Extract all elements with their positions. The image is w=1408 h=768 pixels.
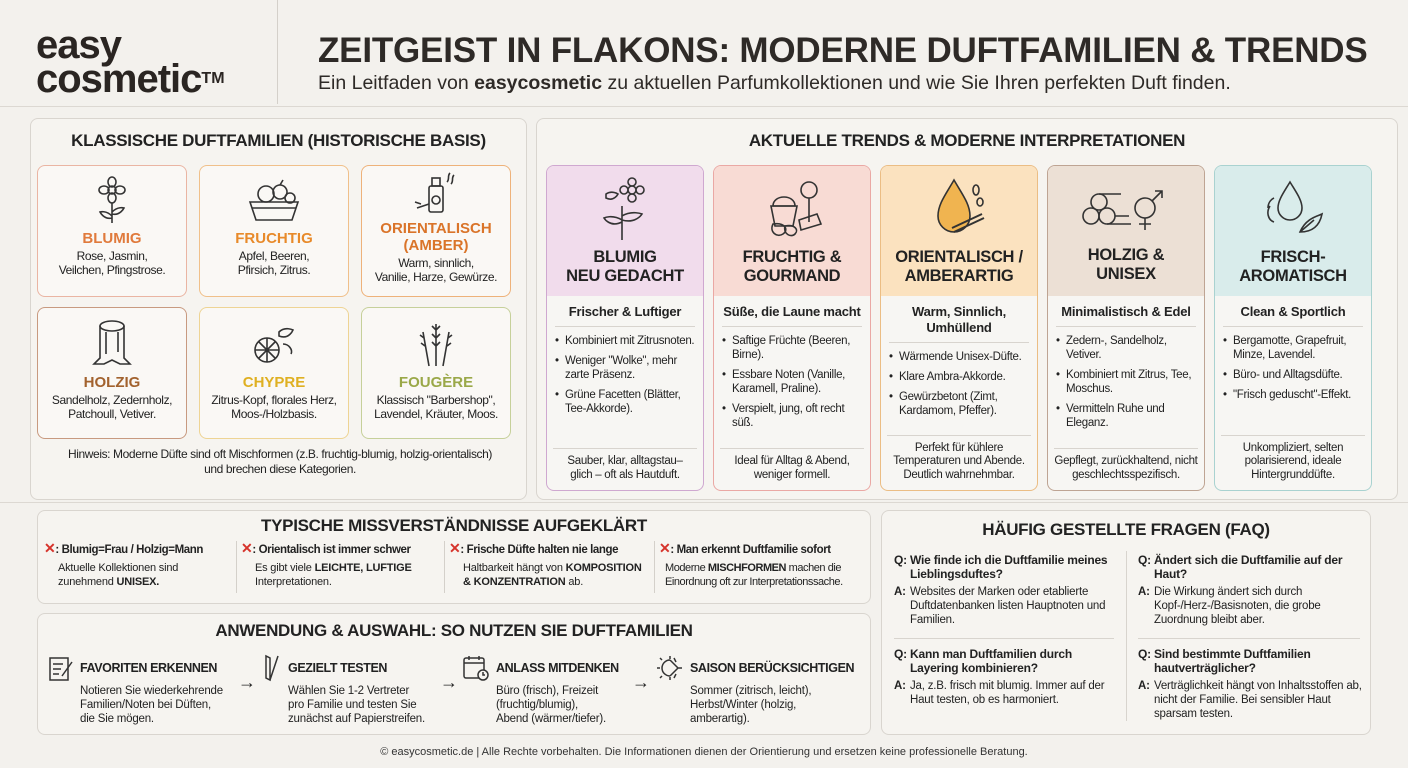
card: holzig: Sandelholz, Zedernholz,: [52, 393, 172, 407]
card: orientalisch amberartig: Gewürzbetont (Zimt, Kardamom, Pfeffer).: [899, 391, 997, 417]
card: chypre: [199, 307, 349, 439]
card: holzig unisex: Vermitteln Ruhe und Eleganz.: [1066, 403, 1165, 429]
card: orientalisch amberartig: Perfekt für kühlere Temperaturen und Abende. Deutlich wahrnehmbar.: [893, 442, 1025, 480]
card: fruchtig gourmand: Saftige Früchte (Beeren, Birne).: [732, 335, 850, 361]
step: favoriten: Familien/Noten bei Düften,: [80, 699, 211, 711]
card: blumig: Veilchen, Pfingstrose.: [59, 263, 165, 277]
myth 2: Es gibt viele LEICHTE, LUFTIGE: [255, 562, 412, 574]
card: fruchtig: Apfel, Beeren,: [239, 249, 309, 263]
card: frisch aromatisch: FRISCH-: [1261, 248, 1325, 266]
step: saison: [657, 656, 854, 725]
step: saison: SAISON BERÜCKSICHTIGEN: [690, 661, 854, 675]
card: frisch aromatisch: Unkompliziert, selten polarisierend, ideale Hintergrunddüfte.: [1243, 442, 1343, 480]
card: holzig unisex: Minimalistisch & Edel: [1061, 304, 1191, 319]
faq 4: [1138, 647, 1362, 720]
faq 3: Q:: [894, 647, 907, 661]
step: favoriten: die Sie mögen.: [80, 713, 154, 725]
card: holzig unisex: [1047, 165, 1205, 491]
card: fruchtig: Pfirsich, Zitrus.: [238, 263, 310, 277]
card: frisch aromatisch: Clean & Sportlich: [1241, 304, 1345, 319]
step: testen: [265, 654, 425, 725]
title: ZEITGEIST IN FLAKONS: MODERNE DUFTFAMILIEN & TRENDS: [318, 31, 1368, 70]
card: blumig neu gedacht: BLUMIG: [593, 248, 657, 266]
heading: missverstaendnisse: TYPISCHE MISSVERSTÄNDNISSE AUFGEKLÄRT: [261, 516, 647, 535]
step: saison: Herbst/Winter (holzig,: [690, 699, 796, 711]
card: blumig neu gedacht: Kombiniert mit Zitrusnoten.: [565, 335, 694, 347]
step: testen: pro Familie und testen Sie: [288, 699, 416, 711]
faq 1: A:: [894, 586, 906, 598]
card: frisch aromatisch: Büro- und Alltagsdüfte.: [1233, 369, 1342, 381]
card: orientalisch: (AMBER): [404, 237, 468, 254]
card: holzig unisex: Gepflegt, zurückhaltend, nicht geschlechtsspezifisch.: [1054, 455, 1198, 480]
myth 3: [444, 541, 642, 593]
arrow: →: [238, 672, 256, 692]
faq 3: Kann man Duftfamilien durch Layering kombinieren?: [910, 647, 1072, 675]
logo: cosmeticTM: [36, 57, 225, 101]
card: orientalisch: Vanilie, Harze, Gewürze.: [375, 270, 497, 284]
card: frisch aromatisch: AROMATISCH: [1239, 267, 1347, 285]
step: testen: zunächst auf Papierstreifen.: [288, 713, 425, 725]
step: saison: amberartig).: [690, 713, 750, 725]
card: blumig neu gedacht: [546, 165, 704, 491]
step: anlass: Abend (wärmer/tiefer).: [496, 713, 606, 725]
card: orientalisch amberartig: AMBERARTIG: [905, 267, 1013, 285]
myth 1: ✕: Blumig=Frau / Holzig=Mann: [44, 540, 203, 556]
myth 3: ✕: Frische Düfte halten nie lange: [449, 540, 618, 556]
card: fruchtig gourmand: GOURMAND: [744, 267, 840, 285]
faq 2: A:: [1138, 586, 1150, 598]
card: orientalisch amberartig: Wärmende Unisex-Düfte.: [899, 351, 1022, 363]
card: orientalisch: ORIENTALISCH: [380, 220, 492, 237]
card: fruchtig gourmand: weniger formell.: [754, 468, 830, 480]
logo: easy: [36, 23, 121, 67]
faq 4: Q:: [1138, 647, 1151, 661]
note: und brechen diese Kategorien.: [204, 462, 356, 476]
note: [68, 447, 492, 476]
step: saison: Sommer (zitrisch, leicht),: [690, 685, 811, 697]
step: favoriten: [49, 657, 223, 725]
faq 3: Ja, z.B. frisch mit blumig. Immer auf der Haut testen, ob es harmoniert.: [910, 680, 1104, 706]
heading: klassische: KLASSISCHE DUFTFAMILIEN (HISTORISCHE BASIS): [71, 131, 486, 150]
card: fougere: [361, 307, 511, 439]
myth 4: Einordnung oft zur Interpretationssache.: [665, 576, 843, 588]
card: blumig neu gedacht: glich – oft als Hautduft.: [570, 468, 680, 480]
card: blumig neu gedacht: Weniger "Wolke", mehr zarte Präsenz.: [565, 355, 677, 381]
card: fougere: Klassisch "Barbershop",: [377, 393, 495, 407]
card: holzig: Patchoull, Vetiver.: [68, 407, 156, 421]
faq 4: Verträglichkeit hängt von Inhaltsstoffen ab, nicht der Familie. Bei sensibler Haut sparsam testen.: [1154, 680, 1362, 720]
card: orientalisch amberartig: Umhüllend: [926, 320, 992, 335]
card: orientalisch: Warm, sinnlich,: [398, 256, 474, 270]
arrow: →: [440, 672, 458, 692]
faq 3: [894, 647, 1104, 706]
myth 4: [654, 541, 843, 593]
card: orientalisch amberartig: ORIENTALISCH /: [895, 248, 1023, 266]
card: orientalisch amberartig: [880, 165, 1038, 491]
card: fruchtig gourmand: Verspielt, jung, oft recht süß.: [732, 403, 844, 429]
card: orientalisch amberartig: Warm, Sinnlich,: [912, 304, 1006, 319]
card: fougere: Lavendel, Kräuter, Moos.: [374, 407, 498, 421]
arrow: →: [632, 672, 650, 692]
card: frisch aromatisch: [1214, 165, 1372, 491]
card: holzig unisex: Zedern-, Sandelholz, Vetiver.: [1066, 335, 1167, 361]
card: blumig neu gedacht: NEU GEDACHT: [566, 267, 684, 285]
card: orientalisch: [361, 165, 511, 297]
myth 1: [44, 540, 203, 588]
card: fruchtig gourmand: FRUCHTIG &: [743, 248, 841, 266]
card: holzig unisex: HOLZIG &: [1088, 246, 1164, 264]
faq 4: A:: [1138, 680, 1150, 692]
step: testen: Wählen Sie 1-2 Vertreter: [288, 685, 409, 697]
card: chypre: CHYPRE: [243, 374, 305, 391]
faq 4: Sind bestimmte Duftfamilien hautverträglicher?: [1154, 647, 1311, 675]
card: fruchtig gourmand: Süße, die Laune macht: [723, 304, 861, 319]
faq 1: [894, 553, 1108, 626]
faq 1: Websites der Marken oder etablierte Duftdatenbanken listen Hauptnoten und Familien.: [910, 586, 1105, 626]
panel: anwendung: [37, 613, 871, 735]
card: blumig neu gedacht: Grüne Facetten (Blätter, Tee-Akkorde).: [565, 389, 681, 415]
card: holzig unisex: Kombiniert mit Zitrus, Tee, Moschus.: [1066, 369, 1191, 395]
myth 1: zunehmend UNISEX.: [58, 576, 159, 588]
panel: missverstaendnisse: [37, 510, 871, 604]
card: fougere: FOUGÈRE: [399, 374, 473, 391]
step: anlass: (fruchtig/blumig),: [496, 699, 578, 711]
myth 2: Interpretationen.: [255, 576, 332, 588]
panel: aktuelle trends: [536, 118, 1398, 500]
faq 1: Wie finde ich die Duftfamilie meines Lieblingsduftes?: [910, 553, 1107, 581]
card: holzig unisex: UNISEX: [1096, 265, 1156, 283]
card: fruchtig gourmand: Essbare Noten (Vanille, Karamell, Praline).: [732, 369, 845, 395]
step: favoriten: Notieren Sie wiederkehrende: [80, 685, 223, 697]
card: blumig: Rose, Jasmin,: [77, 249, 147, 263]
myth 2: [236, 541, 412, 593]
myth 1: Aktuelle Kollektionen sind: [58, 562, 178, 574]
faq 3: A:: [894, 680, 906, 692]
card: fruchtig: [199, 165, 349, 297]
faq 2: Ändert sich die Duftfamilie auf der Haut?: [1154, 553, 1342, 581]
card: blumig: BLUMIG: [82, 230, 142, 247]
step: anlass: [463, 656, 619, 725]
card: fruchtig gourmand: Ideal für Alltag & Abend,: [734, 455, 850, 467]
step: favoriten: FAVORITEN ERKENNEN: [80, 661, 217, 675]
heading: anwendung: ANWENDUNG & AUSWAHL: SO NUTZEN SIE DUFTFAMILIEN: [215, 621, 693, 640]
myth 3: & KONZENTRATION ab.: [463, 576, 583, 588]
card: fruchtig gourmand: [713, 165, 871, 491]
card: blumig neu gedacht: Sauber, klar, alltagstau–: [567, 455, 683, 467]
card: frisch aromatisch: "Frisch geduscht"-Effekt.: [1233, 389, 1351, 401]
card: chypre: Zitrus-Kopf, florales Herz,: [211, 393, 337, 407]
myth 4: ✕: Man erkennt Duftfamilie sofort: [659, 540, 831, 556]
card: blumig: [37, 165, 187, 297]
faq 1: Q:: [894, 553, 907, 567]
heading: faq: HÄUFIG GESTELLTE FRAGEN (FAQ): [982, 520, 1270, 539]
card: chypre: Moos-/Holzbasis.: [231, 407, 317, 421]
myth 3: Haltbarkeit hängt von KOMPOSITION: [463, 562, 642, 574]
subtitle: Ein Leitfaden von easycosmetic zu aktuellen Parfumkollektionen und wie Sie Ihren perfekten Duft finden.: [318, 72, 1231, 94]
card: holzig: [37, 307, 187, 439]
note: Hinweis: Moderne Düfte sind oft Mischformen (z.B. fruchtig-blumig, holzig-orientalisch): [68, 447, 492, 461]
myth 4: Moderne MISCHFORMEN machen die: [665, 562, 841, 574]
heading: trends: AKTUELLE TRENDS & MODERNE INTERPRETATIONEN: [749, 131, 1185, 150]
faq 2: [1138, 553, 1342, 626]
step: anlass: Büro (frisch), Freizeit: [496, 685, 598, 697]
faq 2: Q:: [1138, 553, 1151, 567]
step: anlass: ANLASS MITDENKEN: [496, 661, 619, 675]
card: blumig neu gedacht: Frischer & Luftiger: [569, 304, 681, 319]
footer: © easycosmetic.de | Alle Rechte vorbehalten. Die Informationen dienen der Orientierung und ersetzen keine professionelle Beratung.: [380, 746, 1028, 758]
card: orientalisch amberartig: Klare Ambra-Akkorde.: [899, 371, 1006, 383]
panel: klassische duftfamilien: [30, 118, 527, 500]
card: holzig: HOLZIG: [84, 374, 140, 391]
card: frisch aromatisch: Bergamotte, Grapefruit, Minze, Lavendel.: [1233, 335, 1346, 361]
faq 2: Die Wirkung ändert sich durch Kopf-/Herz-/Basisnoten, die grobe Zuordnung bleibt aber.: [1154, 586, 1321, 626]
card: fruchtig: FRUCHTIG: [235, 230, 313, 247]
myth 2: ✕: Orientalisch ist immer schwer: [241, 540, 411, 556]
logo: [36, 23, 225, 101]
step: testen: GEZIELT TESTEN: [288, 661, 387, 675]
panel: faq: [881, 510, 1371, 735]
